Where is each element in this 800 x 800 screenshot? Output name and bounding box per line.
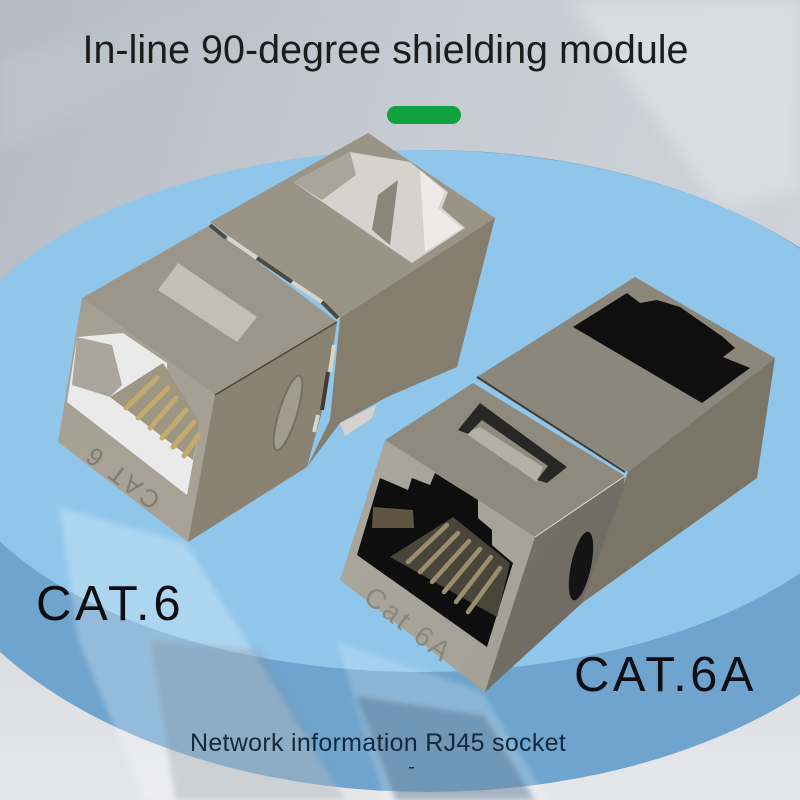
product: right CAT.6A module [340,277,775,692]
seam clips [210,225,338,432]
rear housing top [210,133,495,318]
engraved marking: Cat 6A [358,580,459,669]
label: CAT.6: CAT.6 [36,577,184,631]
latch [458,403,567,483]
front housing top [385,383,625,537]
title: In-line 90-degree shielding module [82,28,689,72]
caption: Network information RJ45 socket [190,729,566,757]
product: left CAT.6 module [58,133,495,542]
front face [340,440,535,692]
front side [485,476,625,692]
socket pins [408,525,500,612]
front housing top [82,225,337,395]
rear socket [573,293,750,403]
front socket [357,473,513,647]
top edge highlight [215,322,337,395]
front face [58,298,215,542]
rear housing side [307,218,495,467]
green pill accent [387,106,461,124]
contact blade [372,507,414,528]
engraved marking: CAT 6 [78,439,166,515]
side slot [268,373,308,453]
side slot [564,530,598,602]
label: CAT.6A: CAT.6A [574,648,757,702]
top edge [535,476,625,537]
socket contact area [110,363,200,460]
side clip [340,405,376,436]
rear housing top [477,277,775,472]
small dash [409,767,414,768]
reflections of the modules [59,507,548,800]
seam [477,377,625,472]
socket contact area [390,517,510,617]
rear housing side [582,358,775,603]
rear socket [293,152,465,263]
latch tab [158,263,257,342]
front side [188,322,337,542]
front socket [67,333,200,495]
socket pins [126,378,198,456]
